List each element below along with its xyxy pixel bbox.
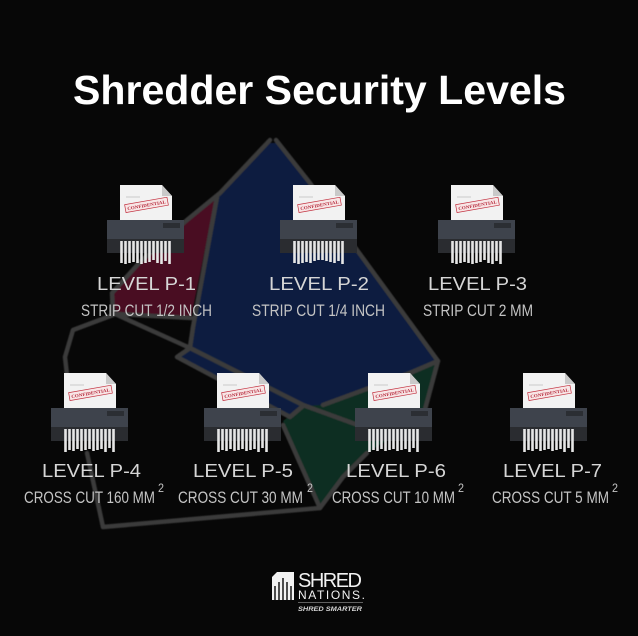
superscript: P-6: 2 xyxy=(458,481,464,495)
superscript: P-5: 2 xyxy=(307,481,313,495)
shredder icon: P-6 xyxy=(355,373,432,452)
shredder icon: P-4 xyxy=(51,373,128,452)
shredder icon: P-1: CONFIDENTIAL xyxy=(127,199,166,211)
background map shape xyxy=(65,140,438,527)
logo: Shred Nations xyxy=(272,570,365,613)
description: P-2: STRIP CUT 1/4 INCH xyxy=(252,301,385,320)
description: P-7: CROSS CUT 5 MM xyxy=(492,488,609,507)
title: Shredder Security Levels xyxy=(73,67,566,113)
description: P-4: CROSS CUT 160 MM xyxy=(24,488,155,507)
shredder icon: P-2: CONFIDENTIAL xyxy=(300,199,339,211)
label: level P-1: LEVEL P-1 xyxy=(97,273,196,294)
shredder icon: P-1 xyxy=(107,185,184,264)
label: level P-7: LEVEL P-7 xyxy=(503,460,602,481)
logo tagline: SHRED SMARTER xyxy=(298,606,362,613)
label: level P-4: LEVEL P-4 xyxy=(42,460,141,481)
label: level P-5: LEVEL P-5 xyxy=(193,460,293,481)
shredder icon: P-4: CONFIDENTIAL xyxy=(71,387,110,399)
shredder icon: P-6: CONFIDENTIAL xyxy=(375,387,414,399)
description: P-6: CROSS CUT 10 MM xyxy=(332,488,455,507)
description: P-1: STRIP CUT 1/2 INCH xyxy=(81,301,212,320)
shredder icon: P-2 xyxy=(280,185,357,264)
shredder icon: P-7: CONFIDENTIAL xyxy=(530,387,569,399)
icon: logo building xyxy=(272,572,294,600)
shredder icon: P-5 xyxy=(204,373,281,452)
superscript: P-7: 2 xyxy=(612,481,618,495)
shredder icon: P-3 xyxy=(438,185,515,264)
logo subword: NATIONS. xyxy=(298,588,365,602)
shredder icon: P-7 xyxy=(510,373,587,452)
logo wordmark: SHRED xyxy=(298,570,362,592)
shredder icon: P-3: CONFIDENTIAL xyxy=(458,199,497,211)
label: level P-2: LEVEL P-2 xyxy=(269,273,369,294)
description: P-5: CROSS CUT 30 MM xyxy=(178,488,303,507)
shredder icon: P-5: CONFIDENTIAL xyxy=(224,387,263,399)
label: level P-3: LEVEL P-3 xyxy=(428,273,527,294)
label: level P-6: LEVEL P-6 xyxy=(346,460,446,481)
superscript: P-4: 2 xyxy=(158,481,164,495)
description: P-3: STRIP CUT 2 MM xyxy=(423,301,533,320)
